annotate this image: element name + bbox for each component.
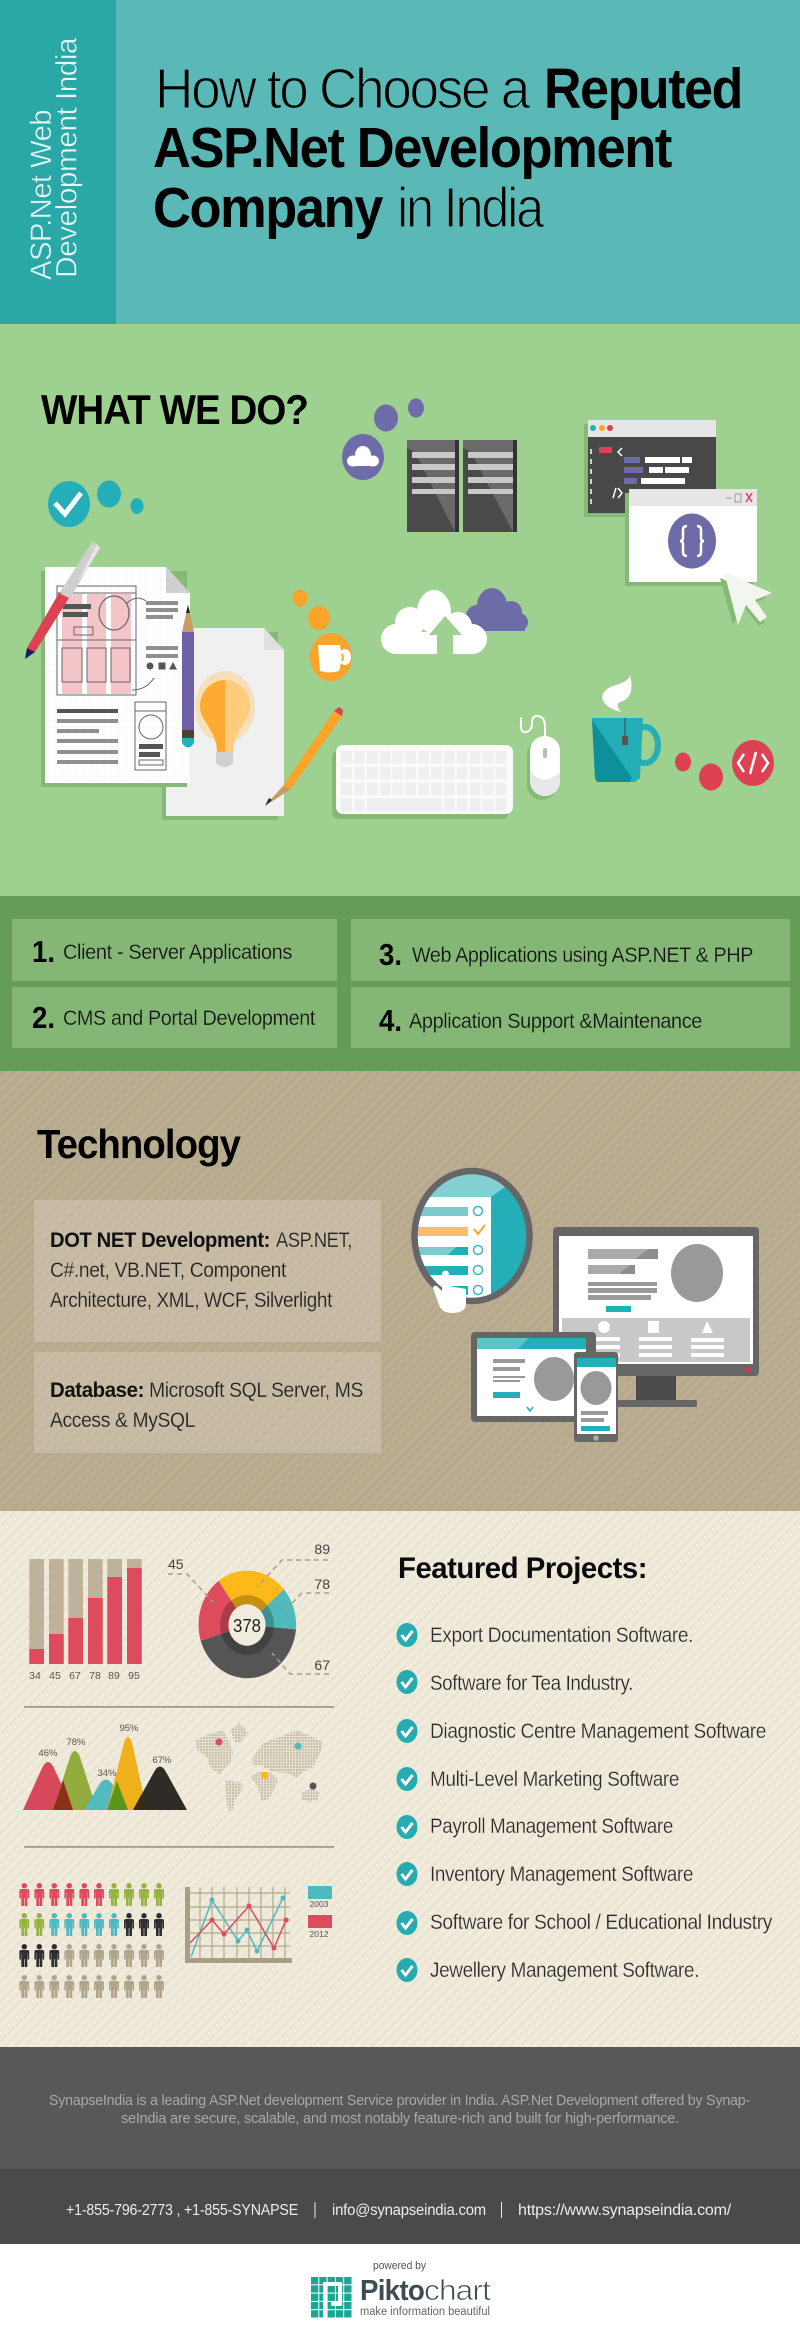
title [153,57,742,240]
list: projects: Software for School / Educational Industry [430,1911,773,1934]
list: projects: Diagnostic Centre Management Software [430,1720,766,1743]
panel: technology [0,1071,800,1511]
side label: ASP.Net Web Development India: Development India [50,37,84,278]
panel: featured projects [0,1511,800,2047]
service 2: 2. [32,1000,55,1035]
icon: phone [574,1352,618,1442]
text box: dot net: C#.net, VB.NET, Component [50,1259,287,1282]
text box: database: Access & MySQL [50,1409,195,1432]
service 4: 4. [379,1003,402,1038]
heading: featured projects: Featured Projects: [398,1552,647,1585]
chart: dot world map [195,1723,323,1812]
chart: line chart: 2012 [310,1929,329,1939]
chart: mountains: 46% [38,1748,58,1759]
icon: keyboard [332,745,513,819]
logo wordmark [360,2275,491,2318]
heading: what we do: WHAT WE DO? [41,386,308,433]
text box: dot net: ASP.NET, [276,1229,352,1252]
side label: ASP.Net Web Development India [25,37,84,280]
chart: stacked bars: 78 [89,1670,101,1682]
about text [49,2093,750,2127]
list: projects [396,1623,773,1982]
chart: people pictogram [19,1883,164,1998]
chart: stacked bars: 67 [69,1670,81,1682]
text box: dot net: Architecture, XML, WCF, Silverlight [50,1289,332,1312]
panel: contact [0,2169,800,2244]
chart: donut [168,1541,330,1678]
chart: mountains: 67% [152,1755,172,1766]
chart: stacked bars: 95 [128,1670,140,1682]
contact details: +1-855-796-2773 , +1-855-SYNAPSE [66,2202,298,2219]
chart: stacked bars: 89 [108,1670,120,1682]
list: projects: Jewellery Management Software. [430,1959,699,1982]
chart: mountains: 34% [97,1768,117,1779]
text box: dot net: DOT NET Development: [50,1229,270,1252]
title: How to Choose a [155,57,531,121]
list: projects: Export Documentation Software. [430,1624,693,1647]
icon: desktop monitor [553,1227,759,1407]
panel: what we do [0,324,800,896]
text box: database [34,1352,381,1453]
icon: code bubbles [675,740,774,790]
chart: line chart: 2003 [310,1899,329,1909]
text box: dot net [34,1200,381,1342]
chart: donut: 45 [168,1556,184,1572]
side label: ASP.Net Web Development India: ASP.Net Web [25,110,58,280]
title: ASP.Net Development [153,116,672,180]
chart: donut: 78 [314,1576,330,1592]
chart: donut: 378 [233,1616,261,1636]
chart: donut: 67 [314,1657,330,1673]
icon: cursor arrow [720,572,772,626]
panel: header [0,0,800,324]
icon: cloud bubbles [342,398,424,480]
text: powered by: powered by [373,2260,426,2272]
icon: brackets window [625,489,757,586]
title: in India [397,176,544,240]
chart: stacked bars [29,1559,142,1682]
chart: mountains: 78% [66,1737,86,1748]
service 4: Application Support &Maintenance [409,1010,702,1033]
chart: mountains: 95% [119,1723,139,1734]
logo wordmark: chart [424,2275,491,2307]
about text: SynapseIndia is a leading ASP.Net development Service provider in India. ASP.Net Development offered by Synap- [49,2093,750,2109]
service 1: Client - Server Applications [63,941,292,964]
icon: coffee bubbles [292,590,352,681]
icon: checklist lens [410,1160,535,1313]
logo wordmark: make information beautiful [360,2306,490,2318]
service 2: CMS and Portal Development [63,1007,316,1030]
text box: database: Microsoft SQL Server, MS [149,1379,363,1402]
list: projects: Multi-Level Marketing Software [430,1768,679,1791]
about text: seIndia are secure, scalable, and most notably feature-rich and built for high-performance. [121,2111,679,2127]
icon: upload clouds [381,588,528,654]
panel: about [0,2047,800,2169]
icon: purple pencil [182,605,194,748]
contact details: info@synapseindia.com [332,2202,486,2219]
logo mark [311,2277,352,2318]
chart: mountains [23,1723,187,1810]
chart: donut: 89 [314,1541,330,1557]
icon: wireframe document [41,567,190,787]
title: Company [153,176,384,240]
icon: server racks [407,440,517,532]
chart: stacked bars: 34 [29,1670,41,1682]
service 3: Web Applications using ASP.NET & PHP [412,944,753,967]
service 1: 1. [32,934,55,969]
heading: technology: Technology [37,1121,241,1167]
list: projects: Software for Tea Industry. [430,1672,633,1695]
icon: tablet [471,1332,596,1422]
side stripe [0,0,116,324]
logo wordmark: Pikto [360,2275,424,2307]
panel: branding footer [0,2244,800,2330]
icon: code window [584,420,716,517]
chart: line chart [185,1886,332,1963]
service 2 [12,987,337,1048]
service 4 [351,987,790,1048]
chart: stacked bars: 45 [49,1670,61,1682]
contact details [66,2202,732,2219]
list: projects: Inventory Management Software [430,1863,693,1886]
icon: light bulb page [162,628,284,820]
icon: coffee mug [592,675,658,782]
icon: check bubbles [48,480,144,527]
contact details: https://www.synapseindia.com/ [518,2202,732,2219]
list: projects: Payroll Management Software [430,1815,673,1838]
panel: services [0,896,800,1071]
service 3 [351,919,790,981]
icon: orange pencil [265,707,343,806]
title: Reputed [544,57,742,121]
icon: mouse [521,716,560,800]
icon: red pen [25,541,100,659]
service 3: 3. [379,937,402,972]
service 1 [12,919,337,981]
text box: database: Database: [50,1379,144,1402]
